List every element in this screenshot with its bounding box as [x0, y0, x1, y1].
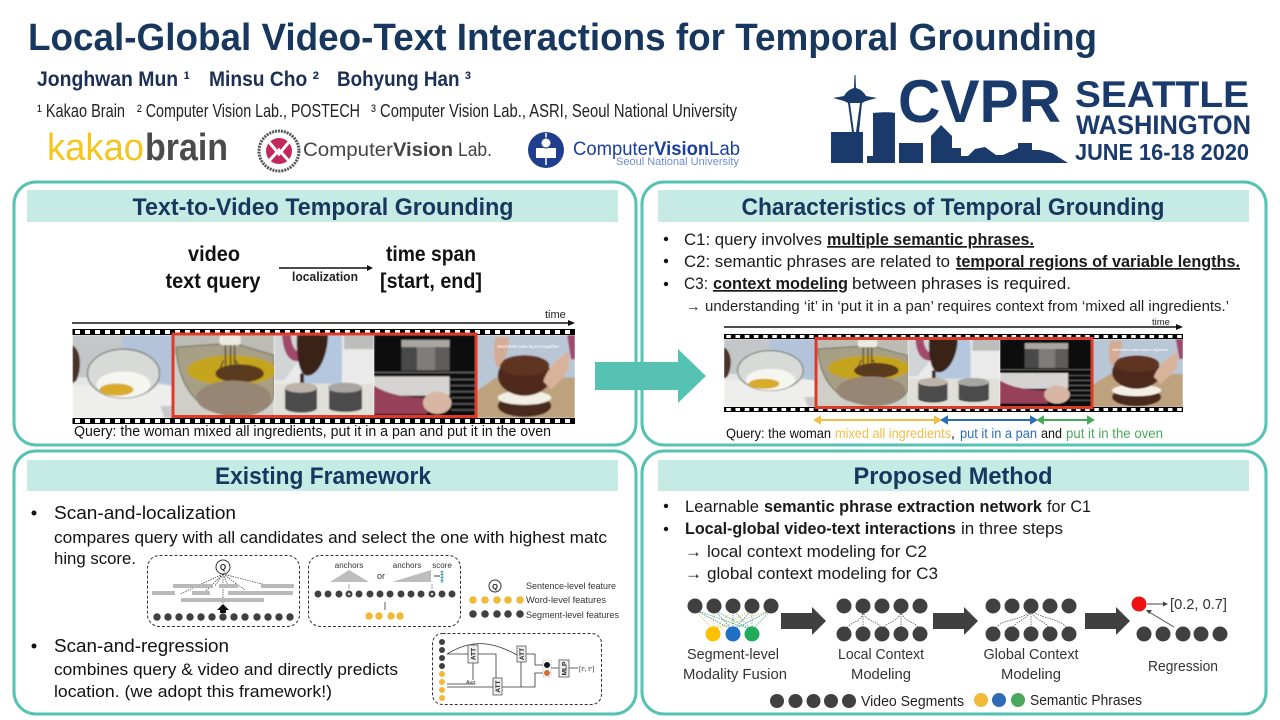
logo: SNU computer vision lab: ComputerVisionLab: [573, 139, 740, 160]
arrow: step 1 to 2: [781, 607, 826, 635]
logo: POSTECH computer vision lab: Vision: [393, 140, 453, 161]
panel: text-to-video temporal grounding: [14, 182, 636, 445]
logo: POSTECH computer vision lab: [259, 131, 492, 171]
scan-and-regression text: Scan-and-regression: [54, 636, 229, 656]
diagram: scan-and-regression network: [432, 634, 602, 704]
logo: CVPR Seattle: WASHINGTON: [1076, 110, 1251, 140]
icon: Seattle skyline: [831, 75, 1068, 163]
diagram: scan-and-regression network: [tˢ, tᵉ]: [579, 665, 594, 673]
query caption with coloured phrases: [726, 425, 1163, 441]
arrow: between top panels: [595, 349, 706, 403]
bullet list: →: [686, 299, 700, 315]
input labels: [166, 243, 261, 293]
method bullet list: [664, 497, 1091, 583]
method bullet list: in three steps: [961, 519, 1063, 538]
scan-and-localization text: compares query with all candidates and select the one with highest matc: [54, 528, 608, 547]
scan-and-regression text: location. (we adopt this framework!): [54, 682, 332, 701]
authors: [37, 68, 471, 91]
diagram: scan-and-regression network: Avg.: [466, 680, 477, 686]
diagram: anchor-based scan: or: [377, 571, 385, 581]
query caption: Query: the woman mixed all ingredients, put it in a pan and put it in the oven: [74, 423, 551, 440]
logo: kakao brain: [47, 127, 228, 169]
video film strip: Stretched cake layers together: [1112, 347, 1169, 352]
timeline arrow: [72, 309, 575, 326]
method bullet list: Local-global video-text interactions: [685, 519, 956, 538]
arrow: localization: [279, 265, 373, 284]
query caption with coloured phrases: Query: the woman: [726, 425, 831, 441]
legend: video segments and semantic phrases: Semantic Phrases: [1030, 692, 1142, 709]
diagram: scan-and-regression network: ATT: [495, 680, 502, 693]
step: regression: [0.2, 0.7]: [1170, 596, 1227, 613]
logo: CVPR Seattle: JUNE 16-18 2020: [1075, 139, 1249, 165]
scan-and-localization text: hing score.: [54, 549, 136, 568]
affiliations: ¹ Kakao Brain: [37, 101, 125, 121]
logo: kakao brain: kakao: [47, 127, 144, 169]
logo: CVPR Seattle: SEATTLE: [1075, 74, 1249, 115]
authors: Minsu Cho ²: [209, 68, 319, 91]
video film strip: Stretched cake layers together: [497, 344, 559, 349]
diagram: anchor-based scan: anchors: [393, 561, 421, 570]
logo: CVPR Seattle: CVPR: [898, 68, 1061, 135]
legend: video segments and semantic phrases: [770, 692, 1142, 710]
step: regression: Regression: [1148, 658, 1218, 675]
diagram: anchor-based scan: score: [432, 561, 452, 570]
bullet list: C2: semantic phrases are related to: [684, 252, 950, 271]
query caption with coloured phrases: ,: [951, 425, 955, 441]
title: Local-Global Video-Text Interactions for Temporal Grounding: [28, 17, 1097, 59]
scan-and-regression text: [32, 636, 398, 701]
step: local context modeling: Modeling: [851, 666, 911, 683]
query caption with coloured phrases: put it in a pan: [960, 425, 1037, 441]
legend: feature types: [469, 580, 619, 621]
legend: feature types: Segment-level features: [526, 610, 619, 621]
bullet list: understanding ‘it’ in ‘put it in a pan’ requires context from ‘mixed all ingredients.’: [705, 299, 1229, 315]
heading: Text-to-Video Temporal Grounding: [132, 194, 514, 221]
panel: characteristics of temporal grounding: [642, 182, 1266, 445]
step: segment-level modality fusion: Modality Fusion: [683, 666, 787, 683]
affiliations: ³ Computer Vision Lab., ASRI, Seoul National University: [371, 101, 737, 121]
input labels: video: [188, 243, 240, 266]
step: segment-level modality fusion: [683, 598, 787, 683]
step: global context modeling: Global Context: [984, 646, 1079, 663]
arrow: step 3 to 4: [1085, 607, 1130, 635]
method bullet list: →: [685, 564, 702, 583]
method bullet list: Learnable: [685, 497, 759, 516]
logo: POSTECH computer vision lab: Computer: [303, 140, 394, 161]
diagram: anchor-free scan: [148, 556, 300, 626]
diagram: scan-and-regression network: MLP: [562, 661, 568, 675]
method bullet list: global context modeling for C3: [707, 564, 938, 583]
logo: kakao brain: brain: [145, 127, 228, 169]
phrase span arrows: [815, 417, 1093, 423]
bullet list: [664, 230, 1240, 315]
arrow: localization: localization: [292, 269, 358, 284]
step: global context modeling: [984, 598, 1079, 683]
logo: SNU computer vision lab: Seoul National University: [616, 156, 740, 168]
query caption with coloured phrases: and: [1041, 425, 1062, 441]
diagram: scan-and-regression network: ATT: [470, 648, 478, 660]
diagram: anchor-based scan: anchors: [335, 561, 363, 570]
legend: video segments and semantic phrases: Video Segments: [861, 693, 964, 710]
video film strip: [72, 329, 575, 424]
scan-and-regression text: combines query & video and directly predicts: [54, 660, 398, 679]
video film strip: [724, 334, 1183, 412]
arrow: step 2 to 3: [933, 607, 978, 635]
bullet list: context modeling: [713, 274, 848, 293]
bullet list: temporal regions of variable lengths.: [956, 252, 1240, 271]
bullet list: C3:: [684, 274, 708, 293]
diagram: anchor-based scan: [308, 556, 460, 626]
method bullet list: →: [685, 542, 702, 561]
panel: proposed method: [642, 451, 1266, 714]
bullet list: between phrases is required.: [852, 274, 1071, 293]
heading: Existing Framework: [215, 463, 432, 490]
method bullet list: semantic phrase extraction network: [764, 497, 1043, 516]
affiliations: [37, 101, 737, 121]
output labels: [380, 243, 482, 293]
panel: existing framework: [14, 451, 636, 714]
bullet list: C1: query involves: [684, 230, 822, 249]
step: regression: [1132, 596, 1228, 675]
output labels: [start, end]: [380, 270, 482, 293]
query caption with coloured phrases: put it in the oven: [1066, 425, 1163, 441]
authors: Bohyung Han ³: [337, 68, 471, 91]
step: global context modeling: Modeling: [1001, 666, 1061, 683]
logo: CVPR Seattle: [831, 68, 1251, 165]
output labels: time span: [386, 243, 476, 266]
scan-and-localization text: Scan-and-localization: [54, 503, 236, 523]
timeline arrow: [724, 317, 1183, 330]
bullet list: multiple semantic phrases.: [827, 230, 1034, 249]
diagram: scan-and-regression network: ATT: [519, 648, 526, 660]
diagram: anchor-free scan: Q: [220, 563, 226, 572]
timeline arrow: time: [545, 309, 566, 321]
step: local context modeling: [836, 598, 928, 683]
method bullet list: for C1: [1047, 497, 1091, 516]
query caption with coloured phrases: mixed all ingredients: [835, 425, 951, 441]
affiliations: ² Computer Vision Lab., POSTECH: [137, 101, 360, 121]
logo: SNU computer vision lab: [528, 132, 740, 168]
step: local context modeling: Local Context: [838, 646, 925, 663]
logo: POSTECH computer vision lab: Lab.: [458, 140, 492, 161]
method bullet list: local context modeling for C2: [707, 542, 927, 561]
legend: feature types: Word-level features: [526, 595, 606, 606]
heading: Proposed Method: [854, 463, 1052, 490]
scan-and-localization text: [32, 503, 608, 568]
step: segment-level modality fusion: Segment-level: [687, 646, 779, 663]
timeline arrow: time: [1152, 317, 1170, 328]
heading: Characteristics of Temporal Grounding: [742, 194, 1164, 221]
input labels: text query: [166, 270, 261, 293]
legend: feature types: Sentence-level feature: [526, 581, 616, 592]
authors: Jonghwan Mun ¹: [37, 68, 190, 91]
legend: feature types: Q: [492, 582, 498, 591]
